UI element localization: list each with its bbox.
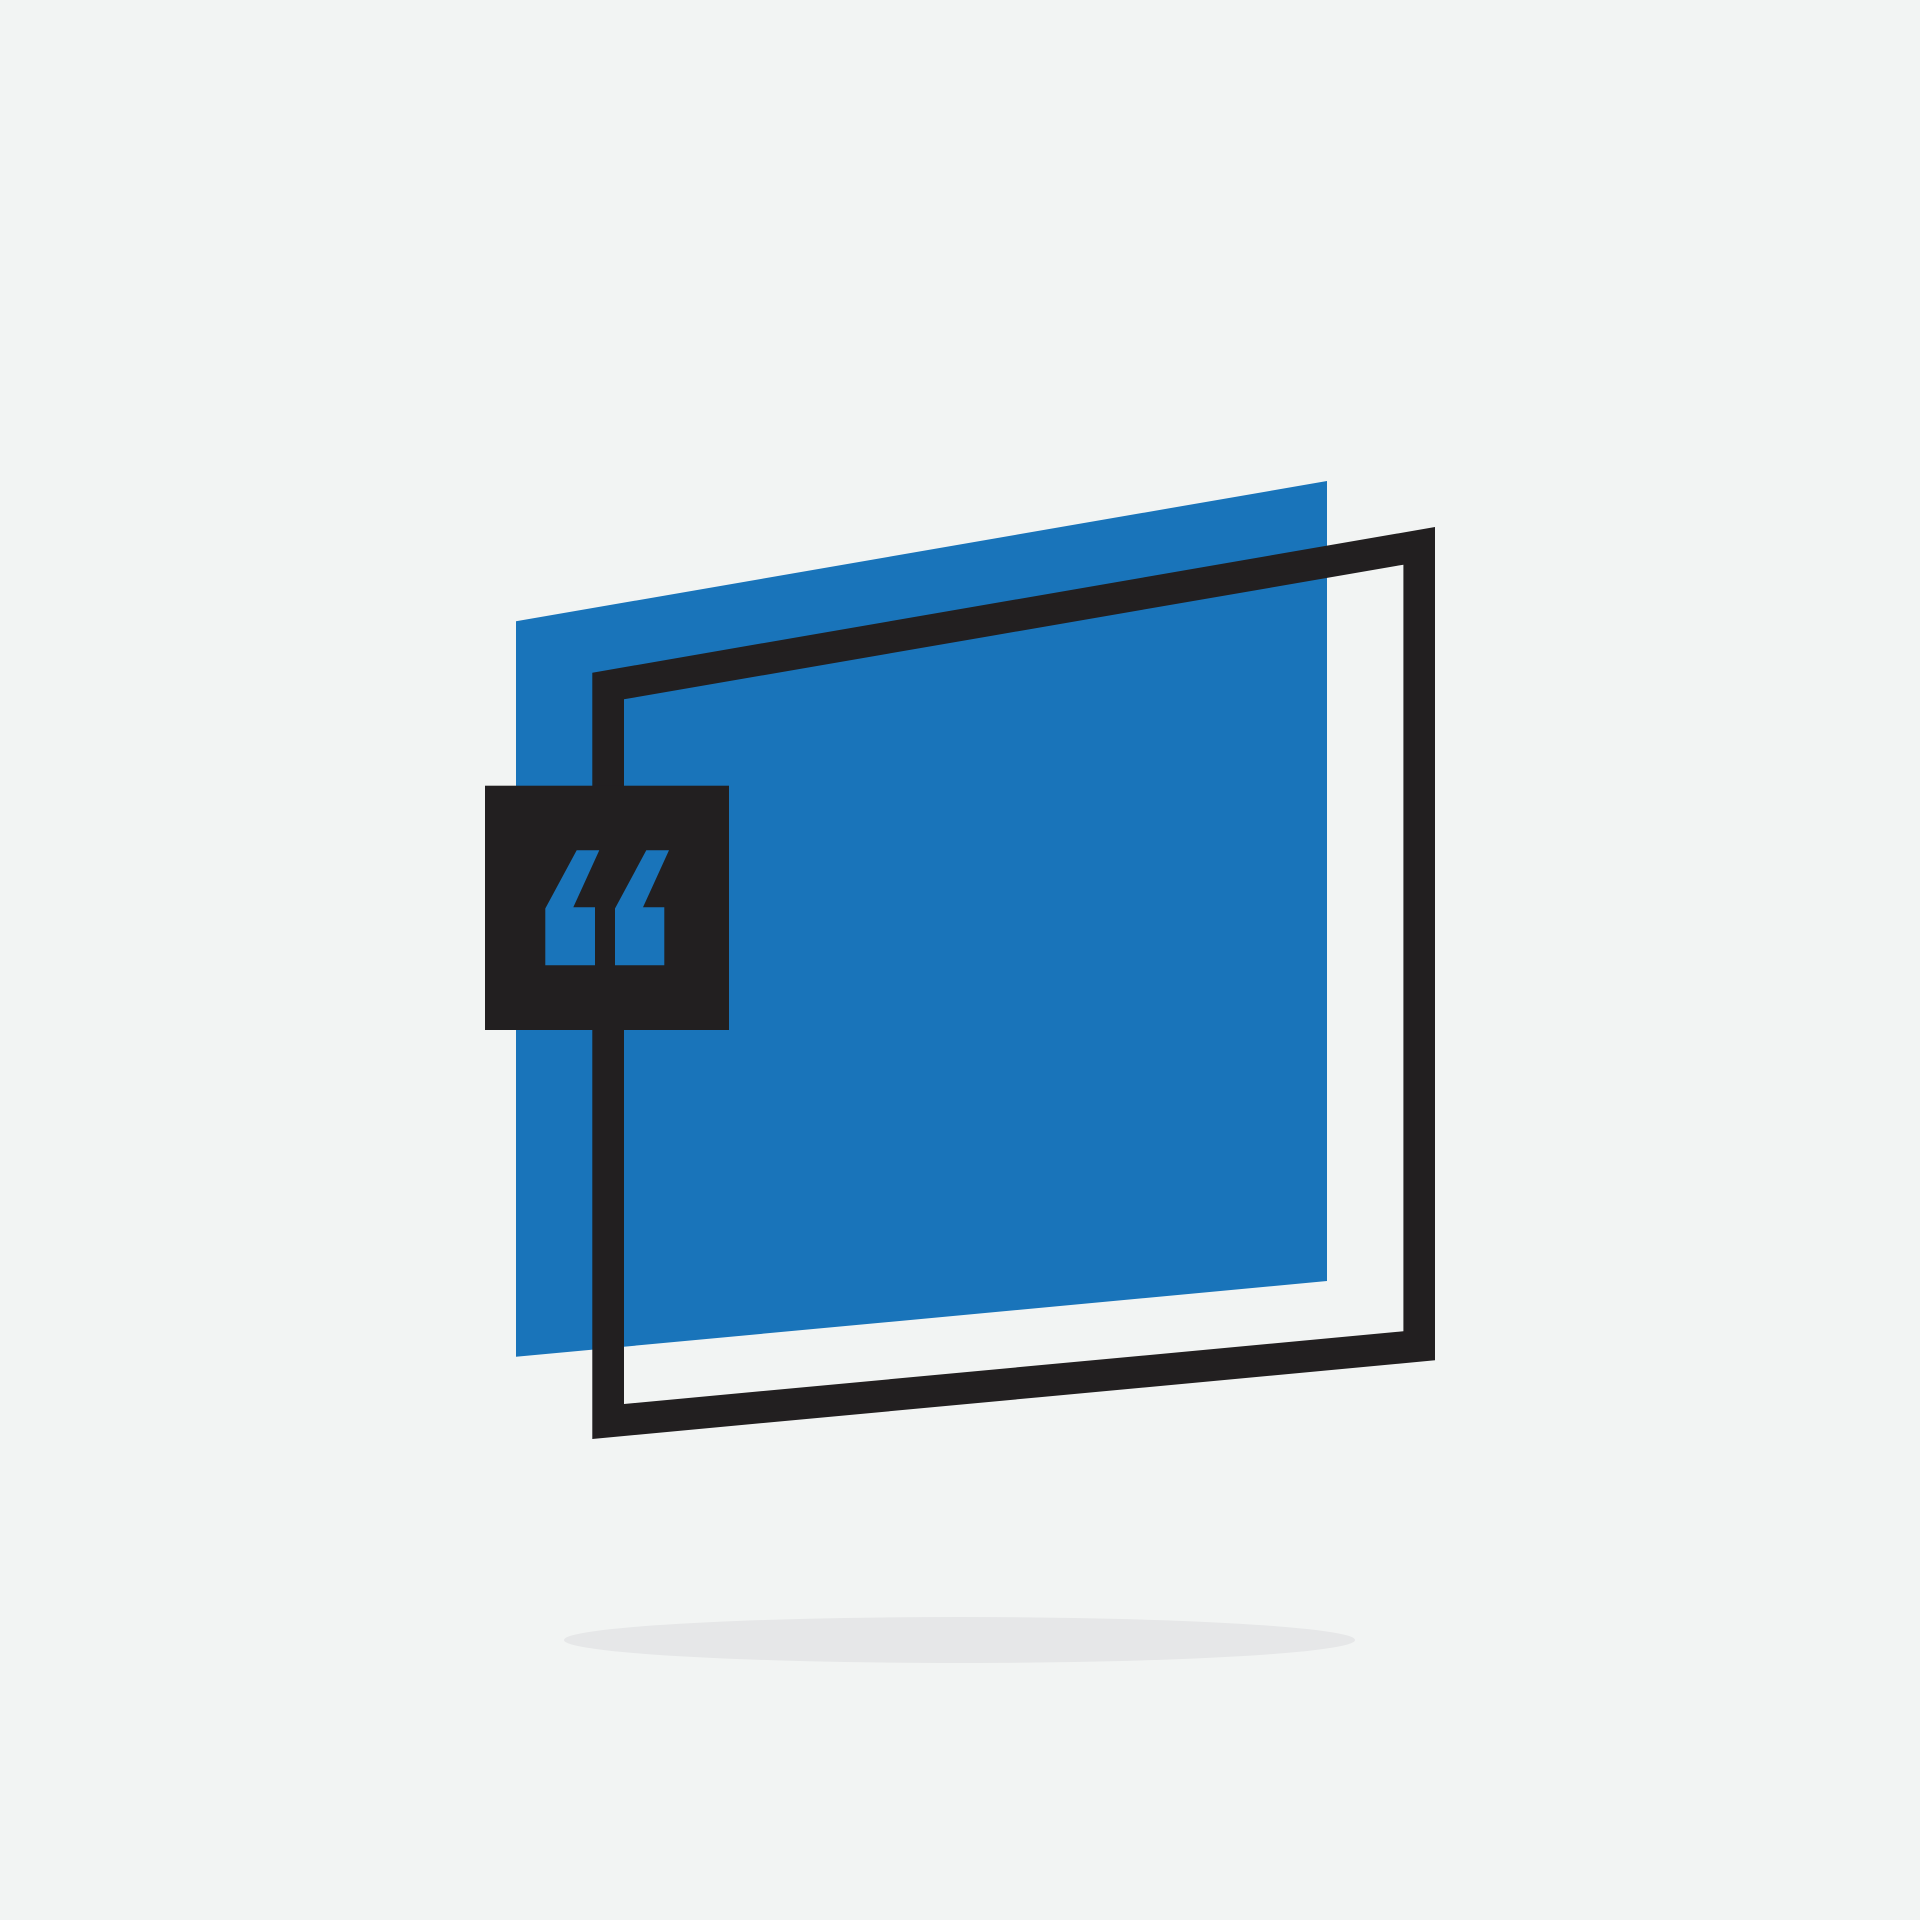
blue skewed panel [516, 481, 1327, 1357]
icon: right quote mark [615, 850, 669, 965]
badge square [485, 786, 729, 1030]
icon: left quote mark [545, 850, 599, 965]
quote badge [485, 786, 729, 1030]
ground shadow ellipse [564, 1617, 1355, 1663]
black outlined frame [592, 527, 1435, 1439]
